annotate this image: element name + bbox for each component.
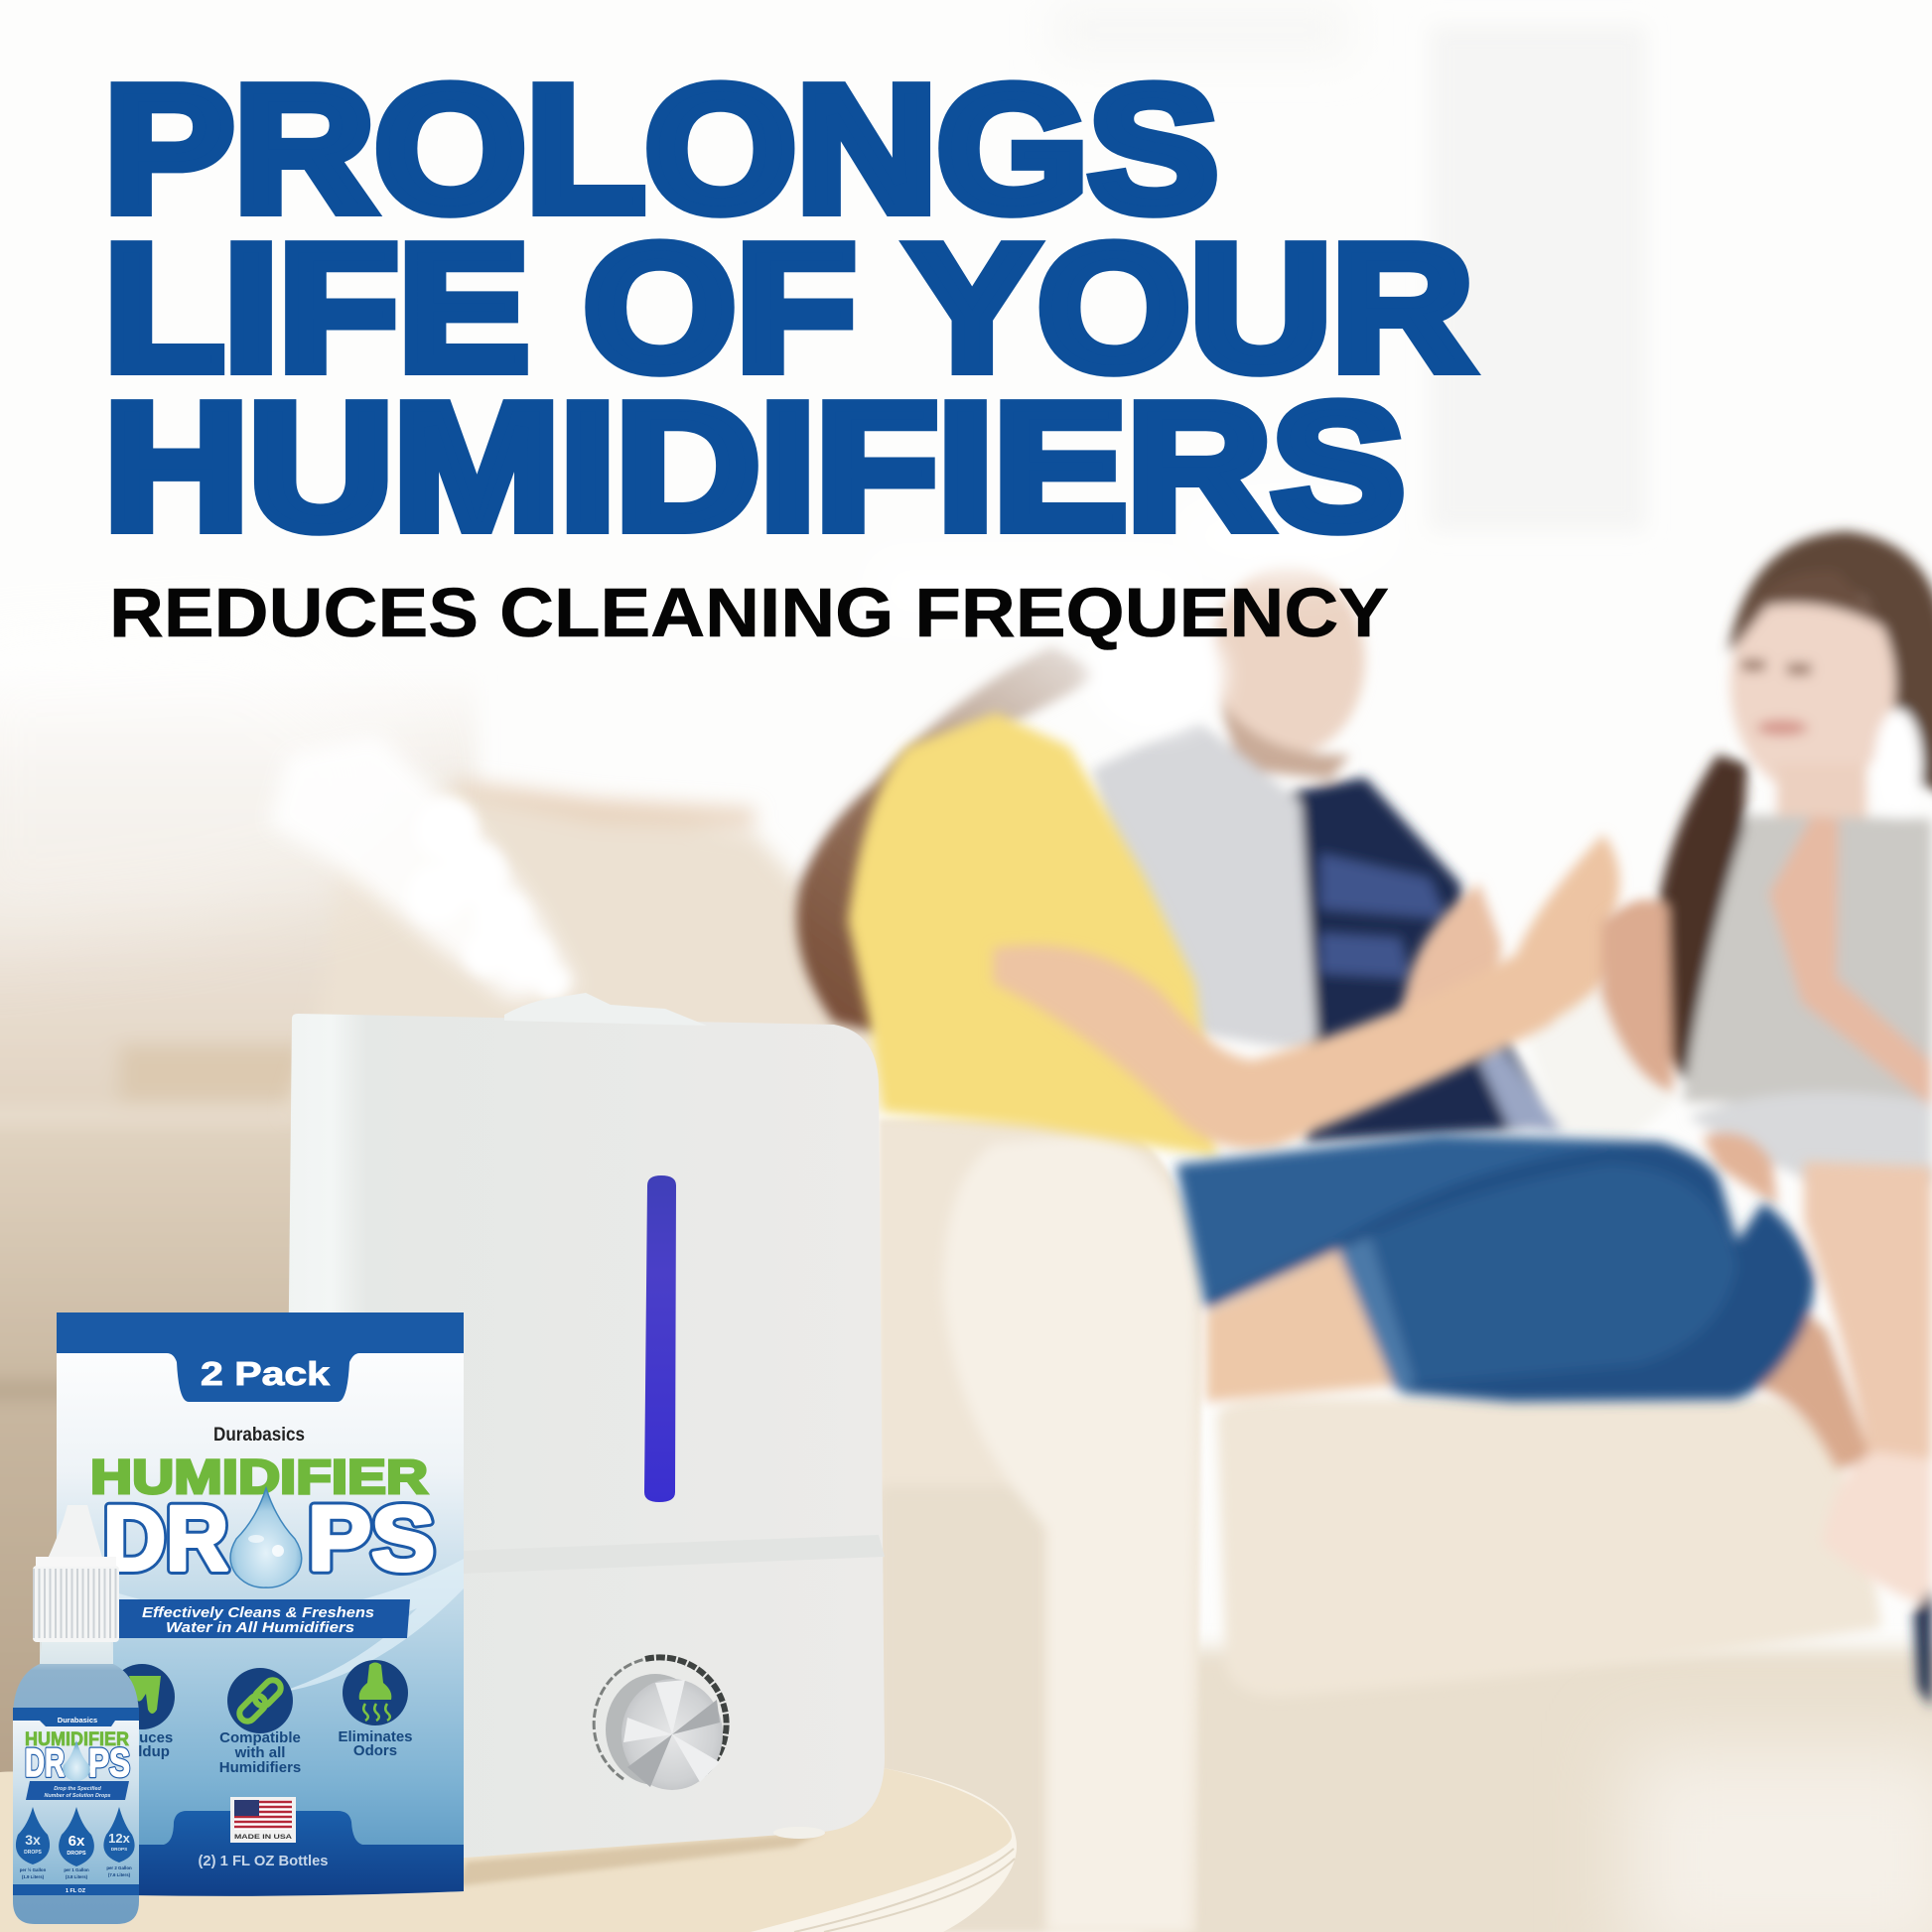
bottle glass (13, 1642, 139, 1924)
pouch bottom band (129, 1811, 464, 1896)
water swoosh (119, 1559, 464, 1693)
label footer: 1 FL OZ (66, 1888, 86, 1894)
pack label: 2 Pack (201, 1355, 331, 1392)
dosage drop: 12x: DROPS (111, 1847, 127, 1852)
base seam (463, 1535, 885, 1574)
tagline banner: Effectively Cleans & Freshens (142, 1604, 374, 1621)
dial knob (606, 1674, 723, 1790)
product: dropper bottle: Durabasics (58, 1716, 97, 1725)
feature: eliminates odors: Odors (353, 1742, 397, 1759)
water drop emblem (230, 1488, 302, 1587)
dosage drop: 3x: (1.9 Liters) (22, 1874, 45, 1879)
label banner (26, 1781, 129, 1800)
foot (773, 1827, 825, 1839)
feature: eliminates odors: Eliminates (338, 1728, 413, 1745)
man's hand (1402, 884, 1501, 1033)
label drops: PS (88, 1741, 130, 1785)
product name drops: DR (103, 1488, 228, 1589)
sofa pillow and back (288, 779, 874, 1112)
dosage drop: 6x (59, 1807, 94, 1879)
title (104, 50, 1473, 567)
subtitle: REDUCES CLEANING FREQUENCY (109, 574, 1389, 651)
dosage drop: 6x: per 1 Gallon (64, 1867, 89, 1872)
bright glare over the heads (874, 496, 1395, 735)
feature: reduces buildup: Reduces (111, 1729, 173, 1746)
made in usa flag: MADE IN USA (234, 1834, 292, 1841)
dosage drop: 12x: per 2 Gallon (106, 1865, 132, 1870)
mist nozzle (504, 993, 707, 1026)
woman's yellow shirt (848, 713, 1217, 1157)
woman's hair (796, 645, 1102, 1033)
dosage drop: 3x: per ½ Gallon (20, 1867, 47, 1872)
left sofa backdrop (0, 675, 477, 1807)
table top (0, 1757, 1017, 1932)
man (1092, 565, 1678, 1142)
product name drops: DR (103, 1488, 228, 1589)
pouch body (57, 1330, 464, 1894)
pouch top band (57, 1312, 464, 1402)
sofa: arm, seat cushion and front (879, 1119, 1932, 1932)
dosage drop: 3x: 3x (25, 1832, 41, 1848)
made in usa flag (230, 1797, 296, 1843)
water level window (644, 1175, 676, 1502)
pouch size text: (2) 1 FL OZ Bottles (199, 1853, 328, 1869)
label footer (13, 1884, 139, 1895)
dosage drop: 3x: DROPS (24, 1850, 43, 1856)
jeans and bare calf (1176, 1135, 1932, 1708)
title: PROLONGS (104, 50, 1218, 249)
dosage drop: 12x: 12x (108, 1831, 131, 1846)
humidifier body (283, 1014, 885, 1863)
dosage drop: 6x: 6x (69, 1833, 85, 1850)
product name green: HUMIDIFIER (90, 1451, 428, 1504)
dosage drop: 6x: DROPS (67, 1851, 86, 1857)
product name drops (103, 1488, 435, 1589)
dosage drop: 12x: (7.6 Liters) (108, 1872, 131, 1877)
label drops: PS (88, 1741, 130, 1785)
label banner: Drop the Specified (54, 1786, 102, 1792)
product name drops: PS (308, 1488, 435, 1589)
dial scale (594, 1657, 727, 1779)
label name: HUMIDIFIER (25, 1729, 129, 1750)
bottle neck (40, 1642, 113, 1664)
label header (13, 1708, 139, 1726)
title: HUMIDIFIERS (104, 367, 1405, 567)
title: LIFE OF YOUR (104, 208, 1473, 408)
tagline banner (119, 1599, 410, 1638)
product name drops: PS (308, 1488, 435, 1589)
icon: compatibility chain (227, 1668, 293, 1733)
feature: compatible: Compatible (219, 1729, 301, 1746)
feature: compatible: with all (234, 1744, 285, 1761)
product: dropper bottle (13, 1505, 139, 1924)
bottle label (13, 1708, 139, 1895)
label drops (25, 1740, 130, 1785)
family on the sofa (blurred) (796, 496, 1932, 1708)
humidifier (283, 993, 885, 1863)
dosage drop: 12x (103, 1807, 135, 1877)
girl (1601, 531, 1932, 1206)
dosage drop: 3x (16, 1807, 50, 1879)
tagline banner: Water in All Humidifiers (166, 1619, 354, 1636)
label banner: Number of Solution Drops (44, 1793, 111, 1799)
icon: buildup (109, 1664, 175, 1729)
woman's arm and hand (993, 834, 1648, 1149)
label drops: DR (25, 1741, 65, 1785)
dosage drop: 6x: (3.8 Liters) (66, 1874, 88, 1879)
icon: odor nose (343, 1660, 408, 1725)
bottle cap (33, 1505, 119, 1642)
feature: compatible: Humidifiers (219, 1759, 301, 1776)
steam plume (0, 616, 578, 1001)
label drops: DR (25, 1741, 65, 1785)
feature: reduces buildup: Buildup (114, 1743, 170, 1760)
brand name: Durabasics (213, 1425, 305, 1446)
product: 2 pack pouch (57, 1312, 464, 1896)
